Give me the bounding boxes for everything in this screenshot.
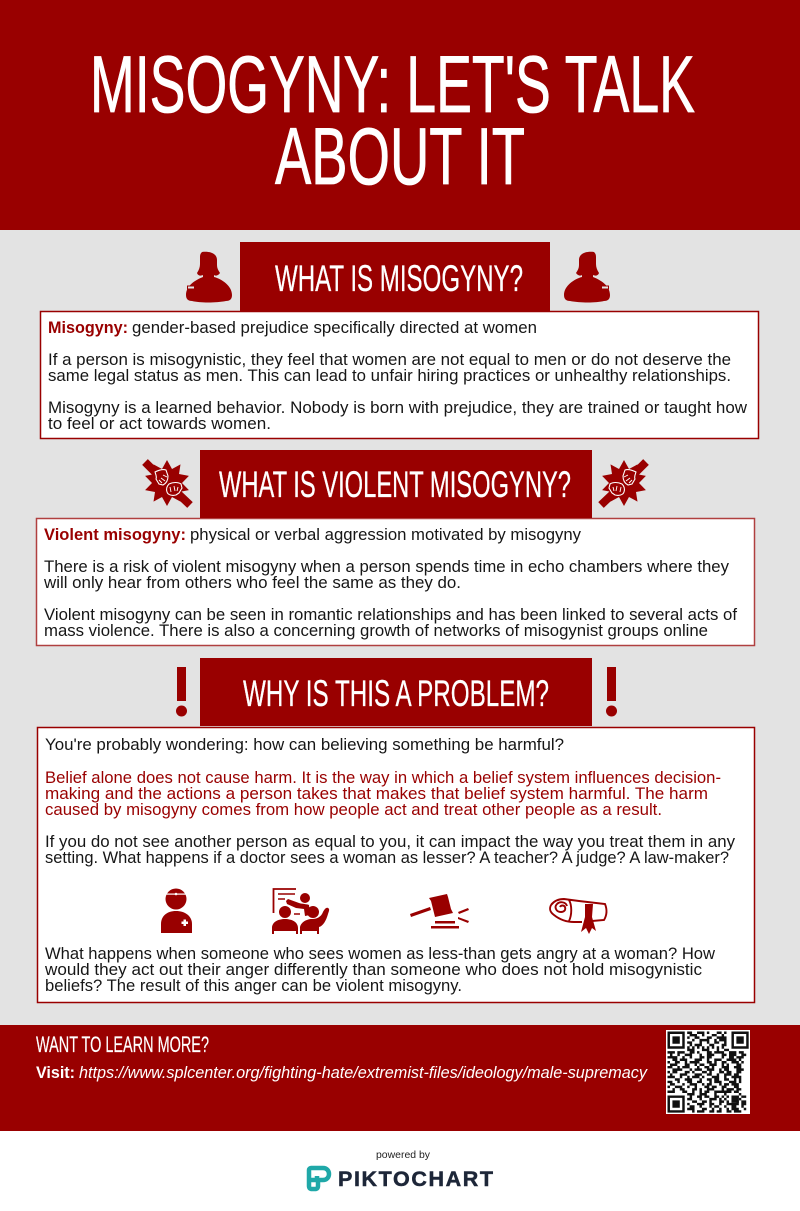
powered by label: powered by — [376, 1150, 430, 1161]
text box: explanation: beliefs? The result of this anger can be violent misogyny. — [45, 977, 462, 995]
text box: explanation: setting. What happens if a doctor sees a woman as lesser? A teacher? A judge? A law-maker? — [45, 849, 729, 867]
wordmark: PIKTOCHART — [338, 1167, 493, 1191]
heading: what is violent misogyny: WHAT IS VIOLENT MISOGYNY? — [219, 464, 571, 505]
text box: explanation: would they act out their anger differently than someone who does not hold misogynistic — [44, 961, 702, 979]
text box: definition of violent misogyny: There is a risk of violent misogyny when a person spends time in echo chambers where they — [44, 558, 730, 576]
heading: what is misogyny — [240, 242, 550, 311]
icon: legal scroll — [550, 899, 606, 934]
text box: definition of violent misogyny: Violent misogyny can be seen in romantic relationships and has been linked to several acts of — [44, 606, 737, 624]
text box: definition of violent misogyny: will only hear from others who feel the same as they do. — [43, 574, 461, 592]
text box: explanation: Belief alone does not cause harm. It is the way in which a belief system influences decision- — [45, 769, 721, 787]
page background — [0, 230, 800, 1025]
icon: teacher and students — [272, 889, 329, 934]
text box: definition of misogyny — [40, 312, 758, 438]
text box: explanation: What happens when someone who sees women as less-than gets angry at a woman? How — [45, 945, 715, 963]
icon: doctor — [161, 888, 192, 933]
qr code — [666, 1030, 750, 1114]
link url: https://www.splcenter.org/fighting-hate/extremist-files/ideology/male-supremacy — [79, 1064, 649, 1082]
text box: definition of misogyny: to feel or act towards women. — [48, 415, 271, 433]
icon: woman silhouette left — [186, 252, 232, 302]
text box: explanation — [38, 728, 754, 1002]
icon: exclamation mark right — [606, 667, 617, 716]
heading: why is this a problem: WHY IS THIS A PROBLEM? — [243, 673, 549, 714]
text box: definition of misogyny: Misogyny: — [48, 319, 128, 337]
text box: explanation: If you do not see another person as equal to you, it can impact the way you treat them in any — [45, 833, 736, 851]
text box: definition of violent misogyny: physical or verbal aggression motivated by misogyny — [190, 526, 582, 544]
footer: learn more — [0, 1025, 800, 1131]
heading: what is misogyny: WHAT IS MISOGYNY? — [275, 258, 523, 299]
text box: explanation: making and the actions a person takes that makes that belief system harmful. The harm — [45, 785, 708, 803]
text box: definition of violent misogyny: Violent misogyny: — [44, 526, 186, 544]
panel: what is misogyny — [40, 242, 758, 438]
text box: explanation: You're probably wondering: how can believing something be harmful? — [45, 736, 564, 754]
heading: want to learn more: WANT TO LEARN MORE? — [36, 1032, 209, 1057]
text box: definition of misogyny: gender-based prejudice specifically directed at women — [132, 319, 537, 337]
panel: what is violent misogyny — [36, 450, 754, 646]
title banner: ABOUT IT — [275, 112, 525, 202]
heading: why is this a problem — [200, 658, 592, 726]
icon: gavel — [410, 894, 469, 928]
heading: what is violent misogyny — [200, 450, 592, 518]
panel: why is this a problem — [38, 658, 754, 1002]
icon: fists right — [601, 460, 646, 506]
icon: piktochart logo — [309, 1168, 329, 1189]
text box: definition of violent misogyny: mass violence. There is also a concerning growth of networks of misogynist groups online — [44, 622, 708, 640]
icon: woman silhouette right — [564, 252, 610, 302]
icon: exclamation mark left — [176, 667, 187, 716]
text box: definition of misogyny: Misogyny is a learned behavior. Nobody is born with prejudice, they are trained or taught how — [48, 399, 747, 417]
text box: definition of violent misogyny — [36, 518, 754, 646]
link label: Visit: — [36, 1064, 75, 1082]
text box: definition of misogyny: same legal status as men. This can lead to unfair hiring practices or unhealthy relationships. — [48, 367, 731, 385]
title banner — [0, 0, 800, 230]
text box: explanation: caused by misogyny comes from how people act and treat other people as a result. — [45, 801, 662, 819]
attribution: powered by piktochart — [0, 1131, 800, 1211]
text box: definition of misogyny: If a person is misogynistic, they feel that women are not equal to men or do not deserve the — [48, 351, 731, 369]
icon: fists left — [145, 460, 190, 506]
